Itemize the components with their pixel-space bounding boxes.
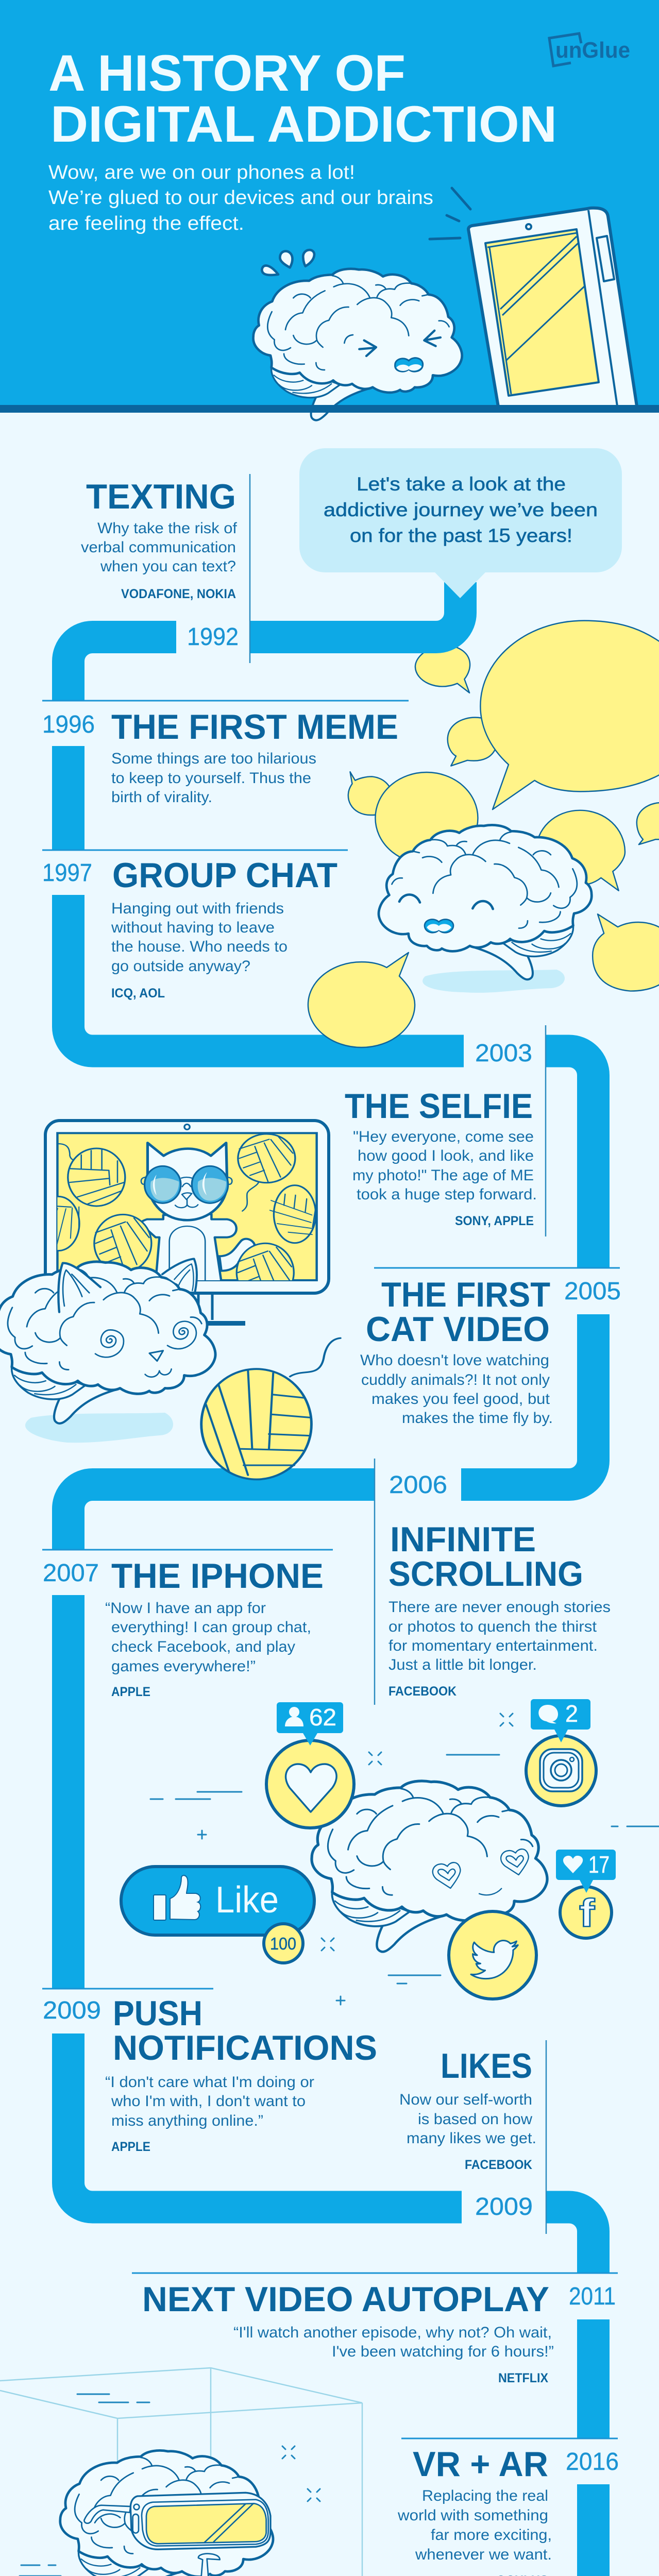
callout: intro speech bubble: Let's take a look at the [357, 473, 566, 495]
heading: the selfie: THE SELFIE [345, 1087, 533, 1126]
text: selfie source: SONY, APPLE [455, 1214, 534, 1228]
heading: the first cat video [366, 1275, 550, 1349]
illustration: big yarn ball [201, 1338, 341, 1479]
text: iphone body: games everywhere!” [111, 1658, 256, 1675]
text: cat video body: makes you feel good, but [371, 1391, 550, 1408]
text: iphone source: APPLE [111, 1685, 150, 1699]
shadow under cat brain [25, 1413, 173, 1443]
text: vr body: far more exciting, [431, 2527, 552, 2544]
badge: 2 [531, 1699, 590, 1742]
text: likes source: FACEBOOK [465, 2158, 532, 2172]
text: texting body [81, 520, 238, 575]
text: push body: who I'm with, I don't want to [111, 2093, 306, 2110]
icon: phone [430, 188, 637, 410]
text: likes body: Now our self-worth [399, 2091, 532, 2108]
text: push body: miss anything online.” [111, 2112, 263, 2129]
drool drip [198, 2554, 220, 2576]
text: vr body: Replacing the real [422, 2487, 548, 2504]
yarn balls in front of the cat [94, 1214, 294, 1302]
brain character, dizzy [254, 269, 462, 420]
brain character, cat [0, 1259, 215, 1423]
text: cat video body [360, 1352, 553, 1427]
icon: sweat drops [262, 250, 314, 275]
heading: the first meme: THE FIRST MEME [111, 707, 398, 747]
text: group chat body: the house. Who needs to [111, 938, 288, 955]
heading: push notifications: PUSH [113, 1994, 202, 2033]
text: scrolling body [388, 1599, 611, 1673]
callout: intro speech bubble [299, 448, 622, 598]
year: 1992: 1992 [187, 623, 239, 651]
text: push source: APPLE [111, 2140, 150, 2154]
year: 2003: 2003 [475, 1040, 532, 1067]
heading: vr + ar: VR + AR [413, 2445, 548, 2484]
decorative dashes and sparkles [20, 2394, 386, 2576]
heading: infinite scrolling [388, 1520, 583, 1594]
vr goggles [84, 2493, 271, 2576]
callout: intro speech bubble: on for the past 15 years! [350, 525, 572, 546]
text: group chat body: without having to leave [111, 919, 275, 936]
badge: 17: 17 [588, 1851, 610, 1878]
heading: the first cat video: CAT VIDEO [366, 1310, 550, 1349]
text: scrolling body: or photos to quench the thirst [388, 1618, 597, 1635]
icon: thumbs up [154, 1875, 200, 1920]
heading: texting: TEXTING [86, 477, 236, 516]
logo: unGlue [549, 33, 630, 66]
text: group chat body [111, 900, 288, 975]
subtitle [48, 162, 433, 234]
panel: the iphone [43, 1556, 324, 1699]
timeline path [68, 582, 594, 2576]
timeline divider lines [42, 474, 620, 2438]
year: 2006: 2006 [389, 1471, 447, 1499]
text: meme body: birth of virality. [111, 789, 212, 806]
year: 2016: 2016 [566, 2448, 619, 2476]
panel: the first cat video [360, 1275, 621, 1427]
text: likes body: many likes we get. [407, 2130, 536, 2147]
icon: instagram circle [526, 1736, 596, 1806]
text: scrolling body: There are never enough stories [388, 1599, 611, 1616]
text: scrolling body: Just a little bit longer. [388, 1656, 537, 1673]
panel: next video autoplay [142, 2280, 616, 2385]
text: meme body [111, 750, 316, 806]
text: selfie body: took a huge step forward. [357, 1186, 537, 1203]
text: likes body: is based on how [418, 2111, 532, 2128]
text: texting body: verbal communication [81, 539, 236, 556]
heading: group chat: GROUP CHAT [112, 856, 337, 895]
text: push body [105, 2074, 314, 2129]
cat in monitor [140, 1143, 255, 1282]
text: group chat body: go outside anyway? [111, 958, 250, 975]
text: selfie body: how good I look, and like [358, 1147, 534, 1164]
speech bubbles behind the timeline [348, 621, 659, 991]
badge: 2: 2 [565, 1700, 578, 1727]
panel: infinite scrolling [388, 1520, 611, 1699]
wireframe cube [0, 2368, 362, 2576]
text: texting source: VODAFONE, NOKIA [121, 587, 236, 601]
sunglasses [141, 1166, 232, 1203]
illustration: monitor with cat selfie [27, 1121, 329, 1326]
text: cat video body: makes the time fly by. [402, 1410, 553, 1427]
like button [121, 1867, 314, 1963]
illustration: social media brain [121, 1699, 659, 2005]
illustration: brain in vr cube [0, 2368, 386, 2576]
icon: heart circle [266, 1740, 354, 1828]
icon: facebook circle [560, 1887, 612, 1938]
title [48, 44, 557, 152]
text: selfie body [352, 1128, 537, 1203]
heading: next video autoplay: NEXT VIDEO AUTOPLAY [142, 2280, 549, 2319]
year: 2007: 2007 [43, 1560, 99, 1587]
year: 2011: 2011 [569, 2283, 616, 2310]
text: texting body: when you can text? [100, 558, 236, 575]
text: iphone body: check Facebook, and play [111, 1638, 295, 1655]
heading: infinite scrolling: SCROLLING [388, 1554, 583, 1594]
text: texting body: Why take the risk of [97, 520, 238, 537]
brain character, happy [379, 825, 592, 979]
badge: 100 [264, 1924, 303, 1963]
text: autoplay body [233, 2324, 554, 2360]
panel: the selfie [345, 1087, 537, 1228]
text: iphone body [105, 1600, 311, 1675]
text: iphone body: everything! I can group chat, [111, 1619, 311, 1636]
brain with heart eyes [312, 1781, 547, 1952]
yarn balls behind the cat [27, 1134, 329, 1254]
text: autoplay body: “I'll watch another episode, why not? Oh wait, [233, 2324, 552, 2341]
title: A HISTORY OF [48, 44, 405, 101]
text: meme body: Some things are too hilarious [111, 750, 316, 767]
subtitle: are feeling the effect. [48, 213, 244, 234]
badge: 62 [277, 1702, 343, 1745]
panel: push notifications [43, 1994, 377, 2154]
text: push body: “I don't care what I'm doing or [105, 2074, 314, 2091]
text: group chat source: ICQ, AOL [111, 986, 165, 1001]
year: 1996: 1996 [42, 711, 95, 738]
text: autoplay source: NETFLIX [498, 2371, 548, 2385]
panel: group chat [42, 856, 337, 1001]
year: 1997: 1997 [42, 859, 92, 887]
text: vr body: whenever we want. [415, 2546, 552, 2563]
speech bubble over timeline [308, 953, 415, 1047]
year: 2005: 2005 [564, 1278, 621, 1305]
callout: intro speech bubble: addictive journey we’ve been [324, 499, 598, 520]
heading: the iphone: THE IPHONE [111, 1556, 324, 1596]
header bottom band [0, 405, 659, 413]
logo: unGlue: unGlue [555, 38, 630, 63]
text: vr body [397, 2487, 552, 2563]
text: group chat body: Hanging out with friends [111, 900, 284, 917]
heading: push notifications: NOTIFICATIONS [113, 2028, 377, 2067]
heading: infinite scrolling: INFINITE [390, 1520, 536, 1559]
text: scrolling source: FACEBOOK [388, 1684, 457, 1699]
panel: texting [81, 477, 239, 651]
icon: facebook circle: f [579, 1891, 595, 1935]
text: meme body: to keep to yourself. Thus the [111, 770, 311, 787]
panel: vr + ar [397, 2445, 619, 2576]
heading: push notifications [113, 1994, 377, 2067]
text: selfie body: my photo!" The age of ME [352, 1167, 534, 1184]
year: 2009: 2009 [43, 1997, 101, 2024]
year: 2009: 2009 [475, 2193, 533, 2221]
subtitle: Wow, are we on our phones a lot! [48, 162, 355, 183]
text: selfie body: "Hey everyone, come see [353, 1128, 534, 1145]
icon: twitter circle [449, 1911, 536, 1999]
text: like: Like [215, 1879, 279, 1921]
panel: likes [399, 2046, 536, 2221]
heading: the first cat video: THE FIRST [381, 1275, 550, 1314]
text: iphone body: “Now I have an app for [105, 1600, 266, 1617]
vr brain [60, 2450, 273, 2576]
text: scrolling body: for momentary entertainment. [388, 1637, 598, 1654]
badge: 62: 62 [309, 1704, 336, 1731]
text: autoplay body: I've been watching for 6 hours!” [332, 2343, 554, 2360]
heading: likes: LIKES [441, 2046, 532, 2086]
title: DIGITAL ADDICTION [50, 95, 557, 152]
text: cat video body: cuddly animals?! It not only [361, 1371, 550, 1388]
text: likes body [399, 2091, 536, 2147]
shadow under group chat brain [423, 970, 565, 993]
subtitle: We’re glued to our devices and our brains [48, 187, 433, 209]
text: vr body: world with something [397, 2507, 548, 2524]
badge: 17 [556, 1850, 616, 1893]
panel: header [0, 0, 659, 420]
text: cat video body: Who doesn't love watching [360, 1352, 549, 1369]
decorative dashes and sparkles [150, 1714, 659, 2005]
panel: the first meme [42, 707, 398, 806]
badge: 100: 100 [270, 1934, 296, 1953]
